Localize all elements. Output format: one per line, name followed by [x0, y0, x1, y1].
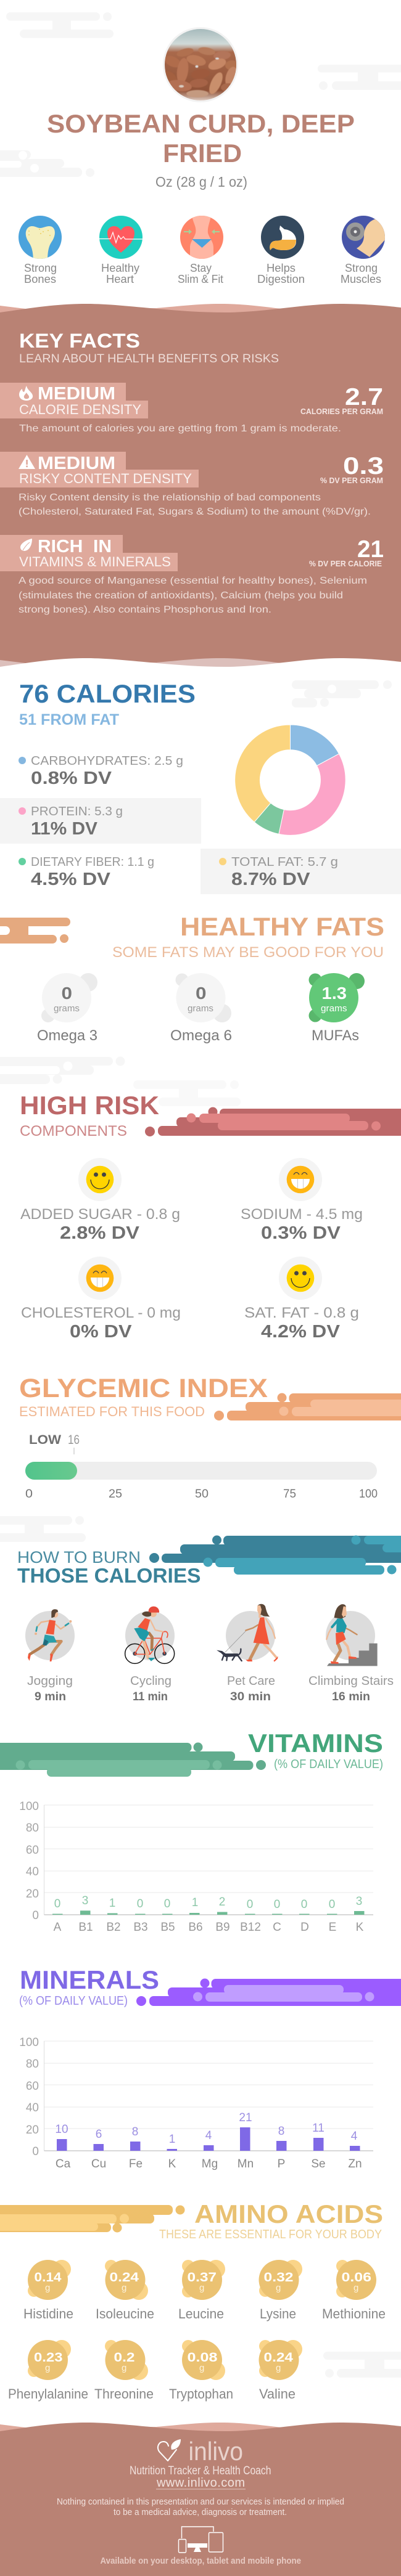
amino: phenylalanine: g [45, 2363, 50, 2373]
bar chart: minerals: 21 [239, 2111, 252, 2124]
icon: digestion [261, 216, 304, 259]
amino: tryptophan: Tryptophan [169, 2386, 233, 2402]
bar chart: vitamins: D [300, 1921, 309, 1934]
bar chart: vitamins: B3 [133, 1921, 148, 1934]
benefit labels [24, 262, 381, 285]
benefit labels: Healthy [101, 262, 139, 274]
bar chart: minerals: Se [311, 2158, 326, 2170]
fact: risky content density: % DV PER GRAM [320, 476, 383, 485]
subheading: calories from fat: 51 FROM FAT [19, 711, 119, 728]
footer [0, 2423, 401, 2576]
amino: methionine: Methionine [322, 2306, 386, 2321]
stat: omega 3: 0 [62, 984, 72, 1003]
amino: tryptophan: g [199, 2363, 204, 2373]
risk: added sugar: ADDED SUGAR - 0.8 g [20, 1206, 180, 1223]
website link: www.inlivo.com [156, 2476, 245, 2490]
amino: valine: 0.24 [264, 2350, 293, 2365]
bar chart: minerals: K [168, 2158, 176, 2170]
amino: histidine [23, 2260, 73, 2321]
disclaimer: to be a medical advice, diagnosis or treatment. [114, 2507, 287, 2517]
amino: threonine: Threonine [94, 2386, 154, 2402]
amino: lysine: g [276, 2283, 281, 2293]
amino: tryptophan: 0.08 [188, 2350, 218, 2365]
bar chart: vitamins: 0 [137, 1897, 143, 1910]
bar chart: vitamins: 20 [26, 1888, 39, 1901]
activity labels: Jogging [27, 1674, 73, 1688]
legend: dietary fiber: DIETARY FIBER: 1.1 g [31, 855, 154, 869]
risk: sodium: 0.3% DV [261, 1223, 341, 1243]
bar chart: minerals: 40 [26, 2101, 39, 2114]
legend: protein [0, 798, 201, 844]
legend: carbohydrates: 0.8% DV [31, 768, 112, 788]
bar chart: vitamins: B12 [240, 1921, 261, 1934]
bar chart: vitamins: 3 [356, 1895, 362, 1908]
heading: those calories: THOSE CALORIES [17, 1564, 201, 1587]
panel: amino acids [0, 2199, 401, 2402]
amino: leucine: Leucine [178, 2306, 224, 2321]
fact: rich in vitamins and minerals [0, 535, 384, 615]
bar chart: vitamins: 60 [26, 1844, 39, 1857]
benefit labels: Heart [106, 273, 134, 285]
benefit labels: Strong [345, 262, 378, 274]
activity labels: Cycling [130, 1674, 172, 1688]
heading: vitamins: VITAMINS [248, 1729, 383, 1758]
benefit labels: Helps [267, 262, 296, 274]
stat: MUFAs [308, 973, 365, 1044]
activity labels: 9 min [35, 1690, 66, 1703]
legend: carbohydrates: CARBOHYDRATES: 2.5 g [31, 754, 183, 768]
disclaimer [57, 2497, 344, 2517]
bar chart: minerals: P [278, 2158, 285, 2170]
bar chart: minerals: Fe [129, 2158, 143, 2170]
fact: rich in vitamins and minerals: strong bones). Also contains Phosphorus and Iron. [19, 605, 271, 615]
fact: rich in vitamins and minerals: 21 [357, 536, 384, 563]
fact: calorie density: The amount of calories you are getting from 1 gram is moderate. [19, 423, 341, 434]
bar chart: vitamins: 0 [329, 1898, 335, 1911]
activity labels: Climbing Stairs [308, 1674, 394, 1688]
activity: jogging [25, 1609, 75, 1661]
fact: calorie density: CALORIES PER GRAM [300, 407, 383, 416]
amino: phenylalanine [8, 2340, 88, 2402]
amino: isoleucine [96, 2260, 154, 2321]
stat: omega 3: Omega 3 [37, 1027, 97, 1044]
bar chart: minerals: Mn [238, 2158, 254, 2170]
subheading: key facts: LEARN ABOUT HEALTH BENEFITS OR RISKS [19, 353, 279, 365]
gauge: glycemic value: 50 [195, 1488, 209, 1501]
bar chart: vitamins: 2 [219, 1896, 225, 1909]
logo: inlivo [158, 2437, 243, 2466]
activity: pet care [217, 1604, 278, 1661]
amino: valine: Valine [259, 2386, 296, 2402]
bar chart: minerals: 20 [26, 2124, 39, 2137]
heading: healthy fats: HEALTHY FATS [180, 912, 384, 941]
bar chart: vitamins: 80 [26, 1822, 39, 1835]
risk: added sugar [20, 1158, 180, 1243]
banner: glycemic index [214, 1393, 401, 1420]
activity: climbing stairs [326, 1604, 378, 1666]
fact: calorie density: MEDIUM [38, 384, 115, 404]
risk: sodium [241, 1158, 363, 1243]
gauge: glycemic value: 0 [25, 1488, 33, 1501]
icon: strong bones [19, 216, 62, 262]
bar chart: vitamins: B1 [78, 1921, 93, 1934]
activity labels: 16 min [332, 1690, 370, 1703]
risk: added sugar: 2.8% DV [60, 1223, 140, 1243]
bar chart: minerals: Zn [348, 2158, 362, 2170]
bar chart: vitamins: B9 [215, 1921, 230, 1934]
panel: key facts [0, 304, 401, 675]
subheading: components: COMPONENTS [20, 1123, 127, 1139]
bar chart: minerals: Mg [202, 2158, 218, 2170]
benefit labels: Bones [24, 273, 56, 285]
amino: methionine: g [353, 2283, 358, 2293]
amino: isoleucine: g [122, 2283, 126, 2293]
risk: saturated fat [244, 1257, 359, 1342]
subheading: minerals: (% OF DAILY VALUE) [19, 1994, 128, 2008]
bar chart: vitamins: A [54, 1921, 62, 1934]
legend: total fat [200, 849, 401, 894]
legend: dietary fiber [19, 855, 154, 889]
stat: MUFAs: MUFAs [312, 1027, 359, 1044]
bar chart: minerals [19, 2036, 373, 2170]
heading: how to burn: HOW TO BURN [17, 1548, 141, 1567]
legend: carbohydrates [19, 754, 183, 788]
banner: burn [149, 1536, 401, 1575]
amino: threonine: 0.2 [114, 2350, 134, 2365]
bar chart: vitamins: B5 [160, 1921, 175, 1934]
bar chart: vitamins: 0 [301, 1898, 307, 1911]
fact: risky content density: (Cholesterol, Saturated Fat, Sugars & Sodium) to the amount (%DV/gr). [19, 507, 371, 517]
gauge: glycemic value: 25 [109, 1488, 122, 1501]
bar chart: minerals: 6 [96, 2128, 102, 2141]
subheading: glycemic index: ESTIMATED FOR THIS FOOD [19, 1404, 205, 1419]
bar chart: vitamins: 0 [54, 1897, 60, 1910]
legend: protein: PROTEIN: 5.3 g [31, 805, 123, 818]
bar chart: vitamins: 0 [247, 1898, 253, 1911]
bar chart: vitamins: 100 [19, 1800, 39, 1813]
icon: strong muscles [342, 216, 386, 259]
food photo: beans [160, 27, 239, 102]
amino: histidine: 0.14 [35, 2270, 62, 2285]
activity labels [27, 1674, 394, 1703]
amino: leucine [178, 2260, 225, 2321]
subheading: vitamins: (% OF DAILY VALUE) [274, 1758, 383, 1771]
bar chart: minerals: 8 [278, 2125, 284, 2138]
heading: glycemic index: GLYCEMIC INDEX [19, 1374, 268, 1403]
fact: risky content density: Risky Content density is the relationship of bad components [19, 492, 321, 503]
amino: threonine: g [122, 2363, 126, 2373]
gauge: glycemic value [25, 1433, 378, 1501]
heading: amino acids: AMINO ACIDS [194, 2199, 383, 2228]
donut chart [235, 725, 345, 835]
activity labels: Pet Care [227, 1674, 275, 1688]
bar chart: vitamins: B6 [188, 1921, 203, 1934]
panel: how to burn calories [0, 1516, 401, 1703]
gauge: glycemic value: 75 [283, 1488, 296, 1501]
bar chart: minerals: 80 [26, 2058, 39, 2071]
stat: MUFAs: 1.3 [322, 984, 347, 1003]
bar chart: vitamins [19, 1800, 373, 1934]
stat: omega 6: 0 [196, 984, 206, 1003]
legend: total fat: 8.7% DV [231, 870, 310, 889]
banner: vitamins [0, 1743, 266, 1777]
amino: threonine [94, 2340, 154, 2402]
risk: cholesterol [21, 1257, 181, 1342]
activity labels: 11 min [133, 1690, 168, 1703]
stat: omega 3 [37, 973, 97, 1044]
bar chart: vitamins: 1 [109, 1897, 115, 1910]
amino: phenylalanine: Phenylalanine [8, 2386, 88, 2402]
bar chart: vitamins: E [329, 1921, 336, 1934]
bar chart: minerals: 8 [132, 2126, 138, 2138]
legend: total fat: TOTAL FAT: 5.7 g [231, 855, 338, 869]
panel: glycemic index [19, 1374, 401, 1501]
risk: saturated fat: 4.2% DV [261, 1322, 341, 1342]
subheading: amino acids: THESE ARE ESSENTIAL FOR YOUR BODY [159, 2228, 382, 2241]
amino: lysine: 0.32 [264, 2270, 294, 2285]
logo: inlivo: inlivo [189, 2437, 243, 2466]
panel: vitamins [0, 1729, 383, 1934]
panel: calories [0, 679, 401, 894]
fact: risky content density: MEDIUM [38, 454, 115, 473]
benefit labels: Strong [24, 262, 57, 274]
heading: minerals: MINERALS [20, 1965, 159, 1994]
bar chart: minerals: 10 [55, 2123, 68, 2136]
benefit labels: Digestion [257, 273, 305, 285]
risk: saturated fat: SAT. FAT - 0.8 g [244, 1305, 359, 1321]
legend: dietary fiber: 4.5% DV [31, 870, 111, 889]
amino: histidine: Histidine [23, 2306, 73, 2321]
fact: risky content density: RISKY CONTENT DENSITY [19, 471, 192, 486]
stat: omega 6: Omega 6 [170, 1027, 232, 1044]
subheading: healthy fats: SOME FATS MAY BE GOOD FOR YOU [112, 944, 384, 961]
legend: protein: 11% DV [31, 819, 98, 839]
amino: phenylalanine: 0.23 [34, 2350, 63, 2365]
fact: calorie density: CALORIE DENSITY [19, 402, 141, 417]
fact: rich in vitamins and minerals: % DV PER CALORIE [309, 559, 382, 568]
risk: cholesterol: 0% DV [70, 1322, 132, 1342]
panel: healthy fats [0, 912, 384, 1044]
benefits icon row [19, 216, 386, 262]
amino: valine: g [276, 2363, 281, 2373]
heading: high risk: HIGH RISK [20, 1091, 159, 1120]
activity: cycling [125, 1607, 175, 1663]
bar chart: minerals: 11 [312, 2122, 325, 2135]
stat: omega 6: grams [188, 1003, 213, 1014]
bar chart: vitamins: K [356, 1921, 364, 1934]
fact: rich in vitamins and minerals: VITAMINS & MINERALS [19, 554, 171, 569]
bar chart: minerals: 100 [19, 2036, 39, 2049]
banner: amino acids [0, 2205, 185, 2232]
bar chart: vitamins: 0 [32, 1909, 39, 1922]
heading: calories: 76 CALORIES [19, 679, 196, 708]
amino: tryptophan [169, 2340, 233, 2402]
bar chart: minerals: 1 [169, 2133, 175, 2146]
heading: key facts: KEY FACTS [19, 330, 140, 352]
amino: methionine [322, 2260, 386, 2321]
fact: calorie density [0, 383, 383, 434]
risk: sodium: SODIUM - 4.5 mg [241, 1206, 363, 1223]
disclaimer: Nothing contained in this presentation and our services is intended or implied [57, 2497, 344, 2507]
icon: healthy heart [99, 216, 143, 259]
bar chart: vitamins: 0 [274, 1898, 280, 1911]
fact: risky content density: 0.3 [343, 453, 384, 479]
benefit labels: Muscles [341, 273, 381, 285]
fact: rich in vitamins and minerals: (stimulates the creation of antioxidants), Calcium (helps you build [19, 590, 343, 601]
bar chart: minerals: 60 [26, 2080, 39, 2093]
bar chart: minerals: Ca [56, 2158, 71, 2170]
bar chart: vitamins: 3 [82, 1894, 88, 1907]
amino: methionine: 0.06 [342, 2270, 371, 2285]
fact: rich in vitamins and minerals: A good source of Manganese (essential for healthy bones), Selenium [19, 576, 367, 586]
fact: calorie density: 2.7 [345, 384, 383, 410]
stat: MUFAs: grams [321, 1003, 347, 1014]
benefit labels: Slim & Fit [178, 273, 223, 285]
amino: isoleucine: 0.24 [110, 2270, 139, 2285]
bar chart: minerals: Cu [91, 2158, 106, 2170]
bar chart: vitamins: 1 [192, 1896, 198, 1909]
amino: leucine: 0.37 [188, 2270, 217, 2285]
serving size: Oz (28 g / 1 oz) [155, 174, 247, 190]
stat: omega 3: grams [54, 1003, 80, 1014]
bar chart: vitamins: C [273, 1921, 281, 1934]
bar chart: vitamins: 0 [164, 1897, 170, 1910]
gauge: glycemic value: 16 [68, 1433, 80, 1447]
bar chart: minerals: 4 [351, 2130, 358, 2143]
bar chart: minerals: 0 [32, 2145, 39, 2158]
panel: minerals [19, 1965, 401, 2170]
amino: lysine: Lysine [260, 2306, 296, 2321]
bar chart: vitamins: 40 [26, 1865, 39, 1878]
fact: rich in vitamins and minerals: RICH IN [38, 537, 112, 556]
banner: high risk [145, 1107, 401, 1136]
title: SOYBEAN CURD, DEEP [47, 109, 355, 138]
amino: valine [259, 2340, 302, 2402]
tagline: Nutrition Tracker & Health Coach [130, 2464, 271, 2477]
banner: minerals [136, 1978, 401, 2006]
amino: leucine: g [199, 2283, 204, 2293]
icon: slim and fit [180, 216, 223, 262]
gauge: glycemic value: 100 [359, 1488, 378, 1501]
bar chart: vitamins: B2 [106, 1921, 121, 1934]
bar chart: minerals: 4 [205, 2129, 212, 2142]
title: FRIED [163, 139, 242, 168]
risk: cholesterol: CHOLESTEROL - 0 mg [21, 1305, 181, 1321]
icon: devices [179, 2527, 223, 2553]
amino: lysine [259, 2260, 302, 2321]
gauge: glycemic value: LOW [29, 1433, 61, 1447]
amino: histidine: g [45, 2283, 50, 2293]
fact: risky content density [0, 452, 384, 517]
availability note: Available on your desktop, tablet and mobile phone [100, 2556, 301, 2566]
stat: omega 6 [170, 973, 232, 1044]
benefit labels: Stay [190, 262, 212, 274]
amino: isoleucine: Isoleucine [96, 2306, 154, 2321]
activity labels: 30 min [230, 1690, 271, 1703]
title [47, 109, 355, 168]
background clouds: header [0, 12, 401, 177]
banner: healthy fats [0, 918, 70, 944]
panel: high risk components [0, 1056, 401, 1342]
